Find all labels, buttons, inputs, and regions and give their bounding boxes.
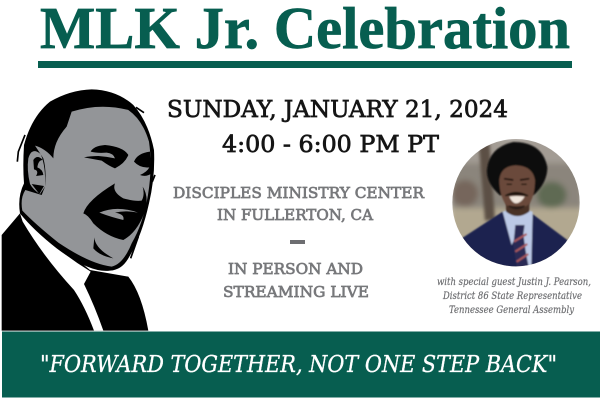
- left eyebrow and eye: [84, 145, 128, 168]
- quote banner: [2, 332, 600, 398]
- moustache: [505, 192, 528, 196]
- format line 2: STREAMING LIVE: [223, 283, 369, 301]
- format line 1: IN PERSON AND: [228, 260, 363, 278]
- suit: [462, 212, 570, 270]
- lips: [99, 209, 138, 220]
- shirt: [503, 207, 533, 267]
- tie: [513, 224, 527, 266]
- ear detail: [32, 157, 44, 194]
- date: SUNDAY, JANUARY 21, 2024: [167, 97, 508, 123]
- background: [450, 137, 583, 272]
- smile: [509, 196, 525, 203]
- quote: "FORWARD TOGETHER, NOT ONE STEP BACK": [40, 352, 557, 378]
- caption line 3: Tennessee General Assembly: [449, 304, 575, 316]
- face: [22, 107, 151, 267]
- portrait illustration: [2, 89, 155, 331]
- banner background: [2, 332, 600, 398]
- location line 2: IN FULLERTON, CA: [217, 206, 373, 224]
- chin crease: [93, 237, 113, 258]
- stray hair and jaw strokes: [17, 107, 155, 258]
- jacket: [2, 213, 148, 331]
- time: 4:00 - 6:00 PM PT: [222, 132, 440, 158]
- brows and eyes: [504, 179, 529, 180]
- shirt collar: [20, 213, 103, 331]
- neck: [506, 202, 529, 216]
- guest photo: [450, 137, 583, 272]
- location: [173, 184, 425, 224]
- dash divider: [290, 240, 305, 244]
- tree trunk: [479, 140, 495, 221]
- afro: [487, 142, 547, 196]
- location line 1: DISCIPLES MINISTRY CENTER: [173, 184, 425, 202]
- head outline and hair: [19, 89, 154, 271]
- face: [499, 165, 535, 208]
- guest caption: [437, 276, 591, 316]
- goatee: [509, 206, 525, 209]
- nose and moustache with mouth: [83, 183, 147, 240]
- attendance format: [223, 260, 369, 301]
- ear: [28, 151, 45, 194]
- title rule: [38, 61, 572, 68]
- right eye: [134, 152, 152, 176]
